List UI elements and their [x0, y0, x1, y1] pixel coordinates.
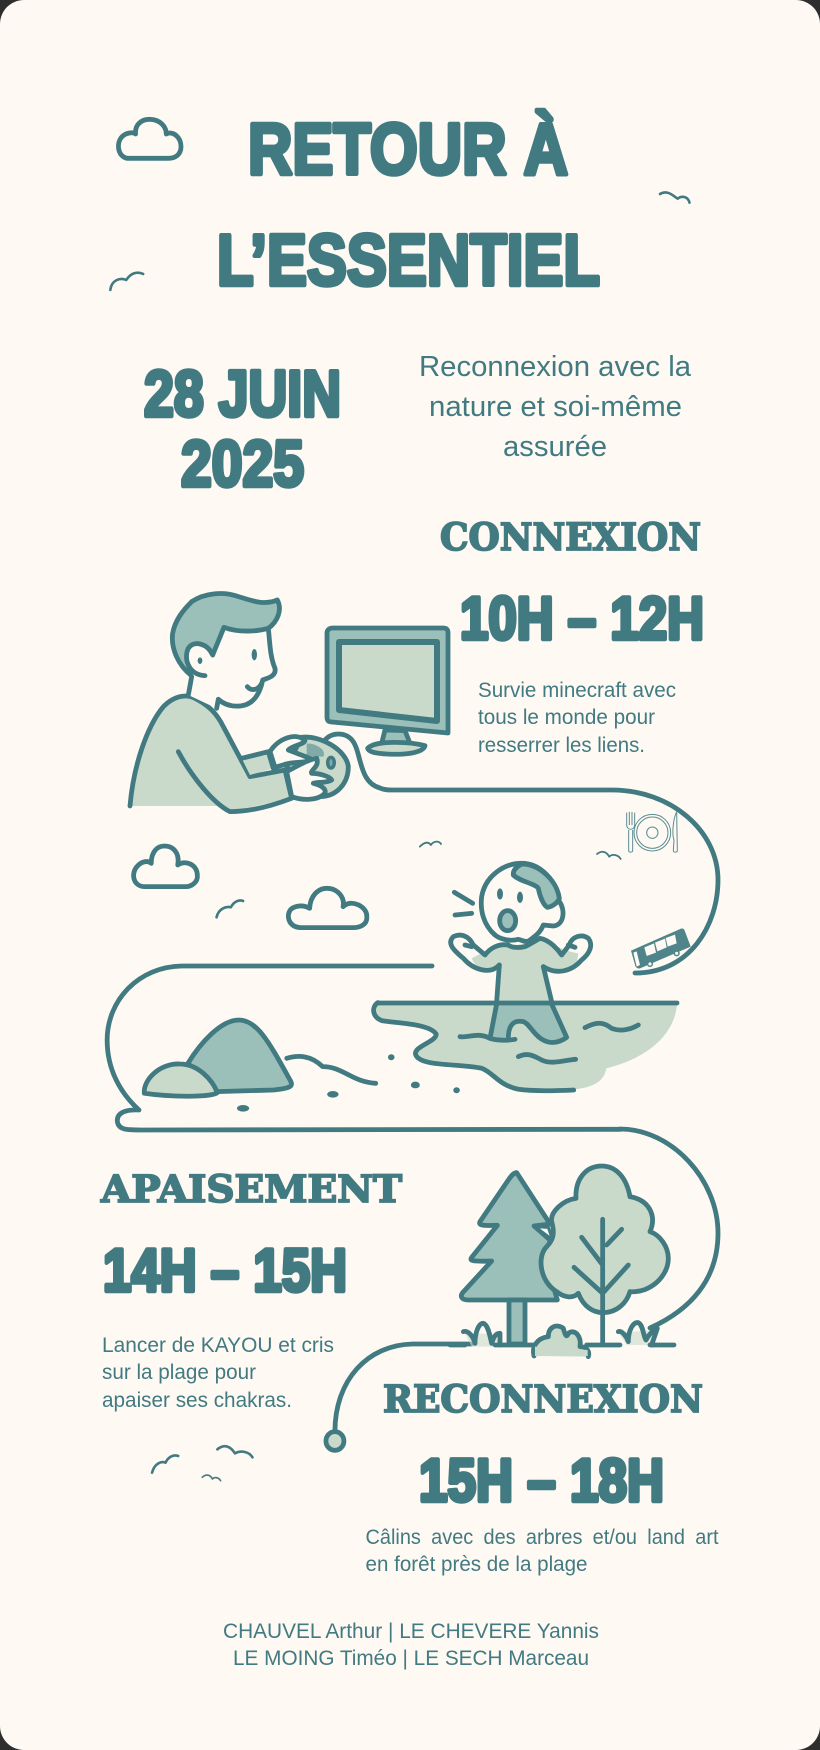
illustration: water [374, 1003, 677, 1091]
heading: reconnexion: RECONNEXION [383, 1377, 703, 1421]
time: 14h to 15h: 14H – 15H [103, 1237, 347, 1304]
icon: trees and grass [450, 1166, 674, 1357]
date: 2025 [181, 427, 304, 500]
subtitle: assurée [503, 431, 607, 463]
mouth [500, 911, 516, 931]
shirt [472, 938, 578, 1002]
footer: authors [223, 1620, 599, 1670]
icon: birds over the beach [217, 842, 621, 917]
upper hand [270, 737, 313, 767]
text: apaisement description: apaiser ses chakras. [102, 1389, 292, 1412]
subtitle: nature et soi-même [429, 391, 682, 423]
date [144, 357, 341, 500]
icon: man playing with controller [130, 594, 348, 812]
torso [497, 965, 552, 1002]
heading: apaisement: APAISEMENT [100, 1167, 402, 1211]
hair and ear [172, 594, 279, 675]
trunk [509, 1300, 525, 1344]
icon: surprised child in water [451, 863, 638, 1062]
water ripples [460, 1035, 490, 1038]
icon: clouds over the beach [134, 846, 367, 928]
footer: authors: CHAUVEL Arthur | LE CHEVERE Yannis [223, 1620, 599, 1643]
icon: plate and cutlery [627, 812, 677, 852]
text: apaisement description: sur la plage pour [102, 1361, 256, 1384]
time: 15h to 18h: 15H – 18H [419, 1447, 664, 1514]
title: L’ESSENTIEL [217, 221, 600, 301]
winding path: lower curve [620, 1129, 718, 1328]
text: connexion description: tous le monde pour [478, 706, 655, 729]
legs [490, 1003, 567, 1042]
legs outline [490, 1004, 567, 1042]
winding path: mid line and left curve [107, 966, 621, 1130]
lower hand [287, 758, 332, 799]
controller [287, 737, 348, 797]
title [217, 110, 600, 301]
eye [252, 649, 257, 660]
icon: computer monitor [327, 628, 448, 754]
icon: bird left of title [110, 273, 143, 290]
winding path: first stretch with cord and right curve [325, 734, 718, 973]
text: apaisement description: Lancer de KAYOU et cris [102, 1334, 334, 1357]
icon: bird right of title [660, 192, 689, 203]
date: 28 JUIN [144, 357, 341, 430]
eyes [497, 888, 503, 900]
icon: bus [631, 928, 691, 968]
subtitle: Reconnexion avec la [419, 351, 692, 383]
grass [465, 1330, 657, 1347]
text: reconnexion description: en forêt près de la plage [366, 1553, 588, 1576]
text: reconnexion description: Câlins avec des arbres et/ou land art [366, 1526, 719, 1549]
forearm [242, 752, 273, 775]
pine tree [461, 1173, 557, 1300]
ear dot [198, 657, 202, 664]
heading: connexion: CONNEXION [440, 515, 701, 559]
hair [513, 864, 559, 907]
body [130, 696, 292, 812]
text: reconnexion description [366, 1526, 719, 1576]
subtitle [419, 351, 692, 463]
text: connexion description: Survie minecraft avec [478, 679, 676, 702]
face [188, 627, 275, 708]
icon: birds bottom left [152, 1446, 252, 1481]
icon: title cloud [118, 119, 181, 158]
time: 10h to 12h: 10H – 12H [460, 585, 704, 652]
shout lines [454, 892, 473, 915]
winding path: end of route with dot [326, 1344, 472, 1450]
title: RETOUR À [248, 110, 568, 190]
text: connexion description [478, 679, 676, 757]
head [481, 863, 563, 941]
illustration: rocks and pebbles [144, 1020, 460, 1112]
text: connexion description: resserrer les liens. [478, 734, 645, 757]
horizon line [378, 1001, 677, 1005]
text: apaisement description [102, 1334, 334, 1412]
round tree [541, 1166, 668, 1313]
footer: authors: LE MOING Timéo | LE SECH Marceau [233, 1647, 589, 1670]
arms and shoulders [451, 935, 591, 971]
